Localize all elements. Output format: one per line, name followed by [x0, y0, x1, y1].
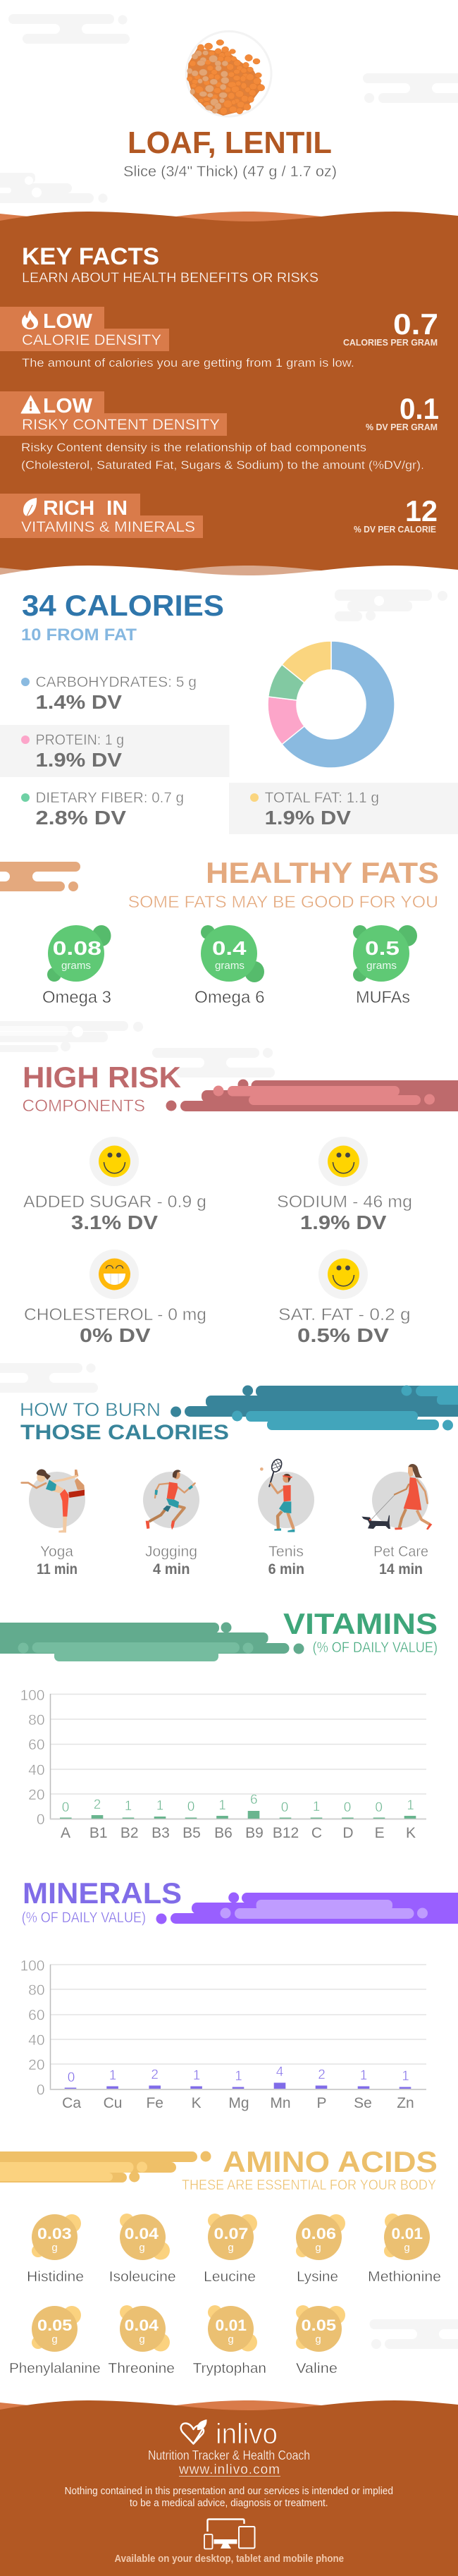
badge: omega 3: Omega 3 — [42, 988, 111, 1007]
stat: dv per calorie: % DV PER CALORIE — [354, 524, 436, 535]
rich in vitamins label: VITAMINS & MINERALS — [21, 519, 195, 535]
badge: lysine: g — [315, 2242, 321, 2254]
legend: protein: 1.9% DV — [35, 749, 122, 771]
bar chart: minerals: 1 — [235, 2069, 242, 2084]
rich in vitamins label — [0, 494, 203, 538]
background clouds: header — [0, 14, 458, 203]
activity: pet care: 14 min — [379, 1561, 423, 1577]
bar chart: minerals: Cu — [104, 2095, 122, 2111]
heading: those calories: THOSE CALORIES — [20, 1421, 229, 1444]
icon: warning triangle — [21, 396, 40, 413]
activity: tennis — [258, 1458, 314, 1577]
calorie density label: CALORIE DENSITY — [22, 332, 161, 348]
badge: tryptophan: 0.01 — [216, 2316, 247, 2334]
badge: phenylalanine: 0.05 — [37, 2316, 72, 2334]
bar chart: minerals: 20 — [28, 2057, 45, 2073]
badge: phenylalanine — [9, 2306, 101, 2376]
badge: isoleucine: 0.04 — [125, 2225, 159, 2242]
legend: total fat: TOTAL FAT: 1.1 g — [265, 790, 379, 806]
legend: carbohydrates: CARBOHYDRATES: 5 g — [35, 674, 197, 690]
badge: omega 3: 0.08 — [53, 937, 101, 959]
activity: jogging — [143, 1470, 199, 1577]
badge: lysine: Lysine — [297, 2269, 338, 2285]
bar chart: vitamins: B3 — [151, 1825, 170, 1841]
badge: isoleucine: Isoleucine — [109, 2269, 176, 2285]
badge: valine: Valine — [296, 2361, 338, 2376]
bar chart: minerals: 1 — [360, 2068, 367, 2083]
badge: threonine — [108, 2305, 175, 2376]
stat: dv per calorie: 12 — [405, 494, 438, 527]
badge: omega 6: 0.4 — [212, 937, 247, 959]
subheading: components: COMPONENTS — [23, 1097, 145, 1116]
risk item: sodium — [277, 1137, 412, 1233]
bar chart: vitamins: 1 — [313, 1800, 320, 1814]
bar chart: vitamins: C — [311, 1825, 322, 1841]
bar chart: vitamins: B2 — [120, 1825, 139, 1841]
legend: dietary fiber: DIETARY FIBER: 0.7 g — [35, 790, 184, 806]
badge: leucine — [204, 2214, 257, 2285]
bar chart: vitamins: 0 — [281, 1800, 288, 1815]
risky content density label: LOW — [43, 395, 93, 417]
text: availability: Available on your desktop, tablet and mobile phone — [114, 2553, 344, 2565]
bar chart: vitamins: B9 — [245, 1825, 264, 1841]
badge: valine — [296, 2305, 345, 2376]
activity: jogging: Jogging — [145, 1544, 197, 1560]
serving size subtitle: Slice (3/4" Thick) (47 g / 1.7 oz) — [123, 164, 337, 180]
badge: omega 6: grams — [215, 960, 245, 972]
decorative band — [0, 1622, 304, 1661]
badge: omega 6: Omega 6 — [194, 988, 265, 1007]
bar chart: vitamins: 1 — [407, 1798, 414, 1813]
icon: jogging figure — [146, 1470, 195, 1530]
risk item: saturated fat: 0.5% DV — [297, 1324, 389, 1346]
activity: yoga — [22, 1470, 85, 1577]
risk item: sodium: SODIUM - 46 mg — [277, 1192, 412, 1211]
bar chart: vitamins: B6 — [214, 1825, 233, 1841]
badge: methionine — [368, 2214, 441, 2285]
panel: how to burn those calories — [20, 1385, 458, 1577]
calorie density label — [0, 307, 169, 351]
badge: lysine — [296, 2214, 345, 2285]
bar chart: minerals: Mg — [228, 2095, 249, 2111]
bar chart: vitamins: B12 — [273, 1825, 299, 1841]
bar chart: vitamins: B1 — [89, 1825, 108, 1841]
panel: footer — [0, 2400, 458, 2576]
decorative band — [166, 1079, 458, 1111]
badge: valine: 0.05 — [302, 2316, 336, 2334]
background cloud: amino acids — [369, 2319, 458, 2349]
badge: histidine: g — [51, 2242, 58, 2254]
bar chart: vitamins: 1 — [125, 1799, 132, 1814]
activity: yoga: 11 min — [37, 1561, 78, 1577]
decorative band — [171, 1385, 458, 1430]
bar chart: vitamins: D — [342, 1825, 354, 1841]
heading: 34 calories: 34 CALORIES — [22, 589, 224, 622]
risk item: cholesterol: CHOLESTEROL - 0 mg — [24, 1305, 206, 1324]
bar chart: minerals: 2 — [151, 2068, 159, 2082]
badge: histidine: Histidine — [27, 2269, 84, 2285]
activity: yoga: Yoga — [40, 1544, 73, 1560]
activity: tennis: 6 min — [268, 1561, 304, 1577]
stat: dv per gram: % DV PER GRAM — [366, 422, 438, 432]
bar chart: minerals: 40 — [28, 2032, 45, 2049]
text: risky density description: (Cholesterol, Saturated Fat, Sugars & Sodium) to the amount (%DV/gr). — [21, 458, 424, 472]
badge: omega 3 — [42, 925, 111, 1007]
bar chart: vitamins: E — [375, 1825, 385, 1841]
risk item: saturated fat — [278, 1250, 410, 1346]
bar chart: minerals: 60 — [28, 2007, 45, 2024]
icon: tennis figure — [260, 1458, 295, 1532]
panel: amino acids — [0, 2145, 441, 2376]
heading: healthy fats: HEALTHY FATS — [206, 856, 439, 889]
stat: dv per calorie — [354, 494, 438, 535]
badge: mufas — [353, 925, 417, 1007]
bar chart: vitamins: 80 — [28, 1712, 45, 1728]
bar chart: minerals: Ca — [62, 2095, 81, 2111]
donut chart — [268, 641, 395, 768]
badge: leucine: Leucine — [204, 2269, 256, 2285]
risk item: added sugar: 3.1% DV — [71, 1211, 158, 1233]
badge: phenylalanine: g — [51, 2333, 58, 2345]
text: risky density description — [21, 441, 424, 472]
badge: threonine: 0.04 — [125, 2316, 159, 2334]
bar chart: vitamins: 1 — [156, 1798, 163, 1814]
bar chart: minerals: 1 — [402, 2069, 409, 2084]
risk item: saturated fat: SAT. FAT - 0.2 g — [278, 1305, 410, 1324]
legend: protein: PROTEIN: 1 g — [35, 732, 124, 748]
legend: dietary fiber: 2.8% DV — [35, 807, 126, 829]
panel: key facts — [0, 212, 458, 587]
bar chart: minerals: Mn — [270, 2095, 291, 2111]
bar chart: vitamins: 0 — [344, 1800, 351, 1815]
stat: dv per gram: 0.1 — [400, 392, 439, 425]
badge: histidine: 0.03 — [37, 2225, 72, 2242]
rich in vitamins label: RICH IN — [43, 497, 128, 520]
badge: omega 6 — [194, 925, 265, 1007]
icon: yoga figure — [22, 1470, 85, 1532]
panel: minerals — [20, 1876, 458, 2111]
badge: mufas: MUFAs — [356, 988, 410, 1007]
bar chart: vitamins: 100 — [20, 1687, 45, 1704]
badge: tryptophan: Tryptophan — [193, 2361, 266, 2376]
legend: carbohydrates — [21, 674, 197, 713]
badge: threonine: Threonine — [108, 2361, 175, 2376]
badge: methionine: g — [404, 2242, 410, 2254]
bar chart: minerals — [20, 1958, 426, 2111]
icon: flame — [22, 310, 38, 329]
bar chart: minerals: 4 — [276, 2065, 284, 2080]
stat: calories per gram: 0.7 — [393, 307, 438, 341]
icon: desktop, tablet and phone — [204, 2519, 255, 2548]
stat: calories per gram: CALORIES PER GRAM — [343, 337, 438, 348]
background cloud: calories — [335, 590, 447, 621]
text: disclaimer: to be a medical advice, diagnosis or treatment. — [130, 2497, 328, 2509]
legend row backgrounds — [0, 725, 458, 834]
badge: methionine: Methionine — [368, 2269, 441, 2285]
logo: inlivo — [181, 2417, 278, 2450]
bar chart: vitamins: B5 — [182, 1825, 201, 1841]
bar chart: vitamins: 20 — [28, 1787, 45, 1803]
subheading: percent of daily value: (% OF DAILY VALUE) — [313, 1640, 438, 1656]
bar chart: vitamins: A — [61, 1825, 70, 1841]
bar chart: vitamins: 40 — [28, 1762, 45, 1778]
bar chart: minerals: Se — [354, 2095, 372, 2111]
heading: high risk: HIGH RISK — [23, 1061, 181, 1094]
badge: leucine: g — [228, 2242, 234, 2254]
panel: vitamins — [0, 1607, 438, 1841]
bar chart: vitamins: 2 — [94, 1797, 101, 1812]
badge: mufas: grams — [366, 960, 397, 972]
decorative band — [156, 1893, 458, 1924]
bar chart: minerals: 1 — [193, 2068, 200, 2083]
subheading: percent of daily value: (% OF DAILY VALUE) — [22, 1910, 146, 1926]
risky content density label — [0, 391, 227, 436]
subheading: from fat: 10 FROM FAT — [21, 625, 137, 645]
stat: calories per gram — [343, 307, 438, 348]
badge: threonine: g — [139, 2333, 145, 2345]
panel: healthy fats — [0, 856, 439, 1007]
badge: valine: g — [315, 2333, 321, 2345]
food image: lentils in a circle — [186, 31, 271, 116]
logo: inlivo: inlivo — [216, 2417, 278, 2450]
legend: total fat: 1.9% DV — [265, 807, 351, 829]
legend: total fat — [250, 790, 379, 829]
bar chart: minerals: 0 — [37, 2082, 45, 2099]
decorative band — [0, 862, 80, 891]
subheading: THESE ARE ESSENTIAL FOR YOUR BODY — [182, 2178, 436, 2193]
heading: minerals: MINERALS — [23, 1876, 182, 1910]
heading: how to burn: HOW TO BURN — [20, 1399, 161, 1420]
badge: methionine: 0.01 — [392, 2225, 423, 2242]
background clouds: high risk — [0, 1021, 275, 1078]
text: calorie density description: The amount of calories you are getting from 1 gram is low. — [22, 356, 354, 370]
bar chart: minerals: 0 — [68, 2070, 75, 2085]
badge: tryptophan: g — [228, 2333, 234, 2345]
activity: tennis: Tenis — [268, 1544, 304, 1560]
subheading: LEARN ABOUT HEALTH BENEFITS OR RISKS — [22, 270, 318, 286]
text: risky density description: Risky Content density is the relationship of bad components — [21, 441, 366, 454]
badge: omega 3: grams — [61, 960, 91, 972]
legend: protein — [21, 732, 124, 771]
heading: amino acids: AMINO ACIDS — [223, 2145, 438, 2178]
bar chart: minerals: 80 — [28, 1982, 45, 1998]
risk item: sodium: 1.9% DV — [300, 1211, 387, 1233]
stat: dv per gram — [366, 392, 439, 432]
bar chart: minerals: Fe — [146, 2095, 163, 2111]
bar chart: minerals: P — [316, 2095, 327, 2111]
bar chart: vitamins: K — [406, 1825, 416, 1841]
bar chart: minerals: Zn — [397, 2095, 414, 2111]
panel: high risk components — [23, 1061, 458, 1346]
bar chart: vitamins: 0 — [187, 1800, 194, 1814]
activity: pet care: Pet Care — [373, 1544, 428, 1560]
activity: pet care — [361, 1464, 432, 1577]
bar chart: vitamins: 0 — [62, 1800, 69, 1815]
decorative band — [0, 2151, 211, 2183]
bar chart: vitamins — [20, 1687, 426, 1841]
calorie density label: LOW — [43, 310, 93, 333]
bar chart: minerals: 100 — [20, 1958, 45, 1974]
heading: key facts: KEY FACTS — [22, 243, 159, 270]
background cloud: burn calories — [0, 1363, 98, 1393]
bar chart: vitamins: 0 — [375, 1800, 383, 1815]
badge: lysine: 0.06 — [302, 2225, 336, 2242]
badge: leucine: 0.07 — [214, 2225, 248, 2242]
title: LOAF, LENTIL — [128, 126, 332, 160]
risky content density label: RISKY CONTENT DENSITY — [22, 417, 220, 433]
badge: isoleucine: g — [139, 2242, 145, 2254]
bar chart: minerals: 1 — [109, 2068, 116, 2083]
bar chart: minerals: 2 — [318, 2068, 326, 2082]
badge: mufas: 0.5 — [365, 937, 400, 959]
link: website: www.inlivo.com — [178, 2462, 280, 2477]
risk item: added sugar — [23, 1137, 206, 1233]
text: disclaimer: Nothing contained in this presentation and our services is intended or implied — [65, 2485, 393, 2497]
panel: calories — [0, 589, 458, 834]
badge: isoleucine — [109, 2214, 176, 2285]
bar chart: vitamins: 6 — [250, 1793, 258, 1807]
bar chart: minerals: K — [192, 2095, 202, 2111]
legend: dietary fiber — [21, 790, 184, 829]
subheading: SOME FATS MAY BE GOOD FOR YOU — [128, 893, 438, 912]
bar chart: vitamins: 60 — [28, 1737, 45, 1753]
badge: phenylalanine: Phenylalanine — [9, 2361, 101, 2376]
icon: woman walking dog — [361, 1464, 432, 1530]
badge: tryptophan — [193, 2305, 266, 2376]
risk item: cholesterol — [24, 1250, 206, 1346]
activity: jogging: 4 min — [153, 1561, 190, 1577]
bar chart: vitamins: 1 — [218, 1798, 226, 1813]
bar chart: vitamins: 0 — [37, 1812, 45, 1828]
risk item: cholesterol: 0% DV — [80, 1324, 151, 1346]
icon: leaf — [23, 498, 37, 516]
badge: histidine — [27, 2214, 84, 2285]
text: tagline: Nutrition Tracker & Health Coach — [148, 2448, 310, 2462]
text: disclaimer — [65, 2485, 393, 2509]
heading: vitamins: VITAMINS — [283, 1607, 438, 1640]
risk item: added sugar: ADDED SUGAR - 0.9 g — [23, 1192, 206, 1211]
legend: carbohydrates: 1.4% DV — [35, 691, 122, 713]
